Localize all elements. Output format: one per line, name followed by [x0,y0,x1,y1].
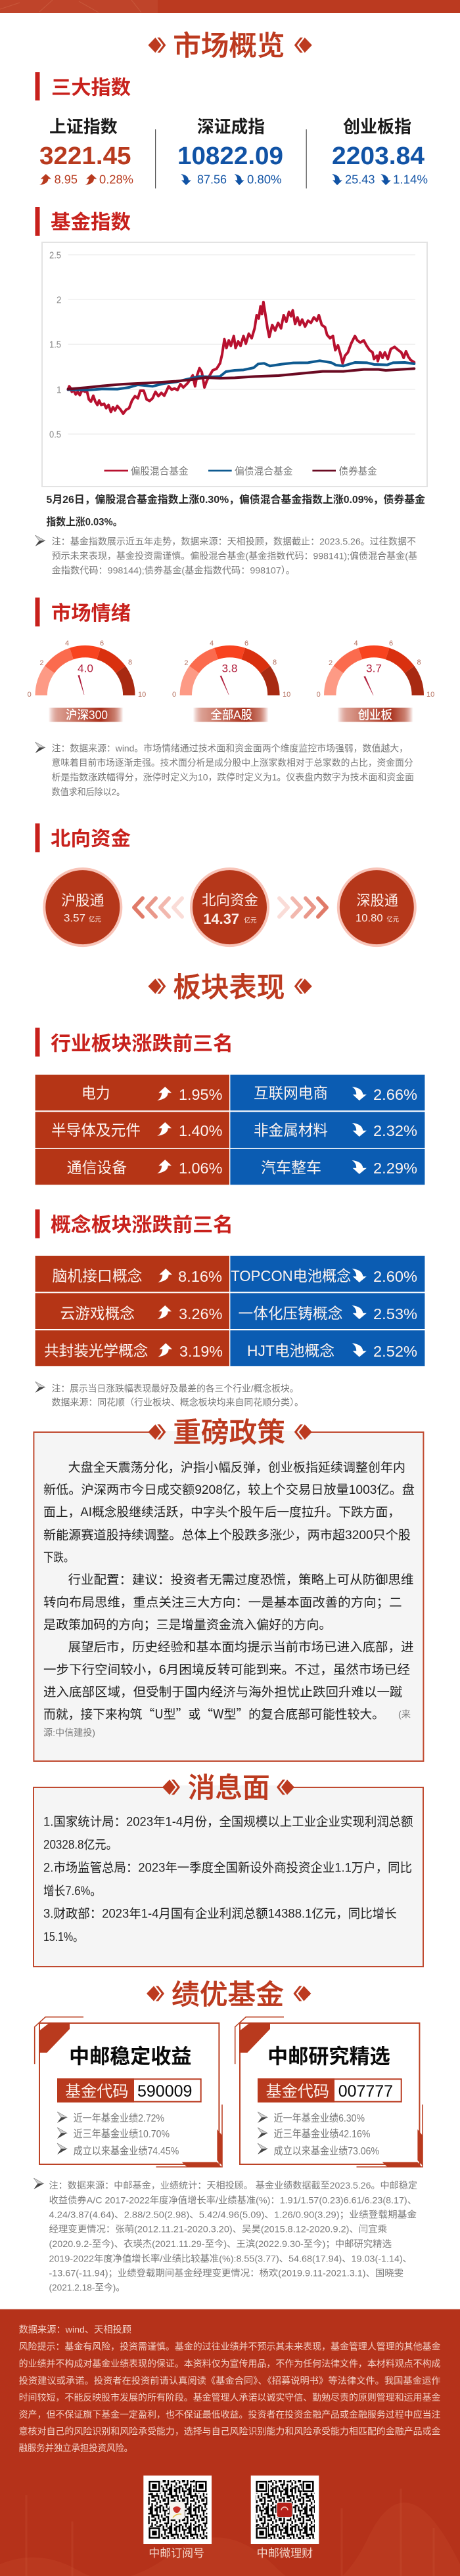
footer disclaimer text: 数据来源：wind、天相投顾 [19,2325,131,2335]
footer disclaimer text: 时间较短，不能反映股市发展的所有阶段。基金管理人承诺以诚实守信、勤勉尽责的原则管理和运用基金 [19,2392,441,2403]
title: 绩优基金 [147,1979,311,2010]
card: 中邮研究精选: 基金代码 [265,2083,329,2101]
footer disclaimer text: 投资建议或承诺。投资者在投资前请认真阅读《基金合同》、《招募说明书》等法律文件。我国基金运作 [19,2375,441,2386]
news list: 3.财政部：2023年1-4月国有企业利润总额14388.1亿元，同比增长 [43,1907,397,1921]
circle: 北向资金: 14.37 [203,911,239,927]
card: 中邮研究精选 [235,2017,423,2167]
table: industry sectors: 半导体及元件 [51,1122,141,1139]
news list: 20328.8亿元。 [43,1837,118,1852]
news list: 15.1%。 [43,1931,83,1944]
table: concept sectors: 共封装光学概念 [44,1342,148,1359]
line chart: fund indexes: 2 [57,294,62,306]
note: sectors: 数据来源：同花顺（行业板块、概念板块均来自同花顺分类）。 [52,1397,304,1407]
title: 板块表现: 板块表现 [173,972,285,1003]
gauge: 创业板: 10 [426,691,434,699]
chevrons: right [279,898,327,917]
table: industry sectors: 1.95% [179,1086,222,1103]
heading: 北向资金: 北向资金 [51,828,131,850]
table: industry sectors: 2.66% [373,1086,417,1103]
gauge: 全部A股: 6 [244,640,248,647]
gauge: 全部A股: 8 [273,659,277,666]
gauge: 创业板: 0 [317,691,321,699]
panel body text: 新低。沪深两市今日成交额9208亿，较上个交易日放量1003亿。盘 [43,1483,415,1497]
legend: 偏股混合基金 [131,466,189,477]
circle: 沪股通: 亿元 [89,915,101,923]
table: industry sectors: 2.29% [373,1160,417,1177]
card: 中邮稳定收益 [35,2017,222,2167]
table: concept sectors: HJT电池概念 [247,1342,334,1359]
note: fund index: 预示未来表现，基金投资需谨慎。偏股混合基金(基金指数代码：998141);偏债混合基金(基 [52,550,417,561]
heading: 北向资金 [35,823,131,852]
heading: 行业板块涨跌前三名: 行业板块涨跌前三名 [51,1033,233,1055]
note: funds: 4.24/3.87(4.64)、2.88/2.50(2.98)、5.42/4.96(5.09)、1.26/0.90(3.29)；业绩登载期基金 [49,2209,417,2220]
QR code: 中邮订阅号: 中邮订阅号 [149,2547,204,2560]
index: 创业板指: 1.14% [393,173,428,186]
index: 深证成指: 0.80% [247,173,281,186]
panel title [162,1772,294,1803]
news list: 增长7.6%。 [43,1884,101,1898]
card: 中邮稳定收益: 近三年基金业绩10.70% [74,2128,170,2140]
note: sectors: 注：展示当日涨跌幅表现最好及最差的各三个行业/概念板块。 [52,1383,298,1393]
circle: 深股通: 10.80 [356,911,383,925]
header band [0,0,460,13]
index: 深证成指: 深证成指 [197,117,265,137]
panel body text: 大盘全天震荡分化，沪指小幅反弹，创业板指延续调整创年内 [68,1460,405,1475]
table: concept sectors: TOPCON电池概念 [231,1267,351,1284]
note: funds: 2019-2022年度净值增长率/业绩比较基准(%):8.55(3.77)、54.68(17.94)、19.03(-1.14)、 [49,2253,412,2263]
title: 市场概览: 市场概览 [173,30,285,61]
circle: 沪股通 [44,869,121,946]
footer panel [0,2309,460,2576]
panel body text: 行业配置：建议：投资者无需过度恐慌，策略上可从防御思维 [68,1573,414,1587]
footer disclaimer text: 风险提示：基金有风险，投资需谨慎。基金的过往业绩并不预示其未来表现，基金管理人管理的其他基金 [19,2342,441,2352]
card: 中邮研究精选: 成立以来基金业绩73.06% [273,2145,379,2157]
legend: 偏债混合基金 [235,466,293,477]
gauge: 沪深300: 6 [100,640,104,647]
table: industry sectors: 互联网电商 [254,1085,328,1102]
panel body text: 转向布局思维，重点关注三大方向：一是基本面改善的方向；二 [43,1596,402,1610]
index: 上证指数: 3221.45 [39,142,131,170]
table: concept sectors [35,1256,425,1366]
panel body text: 面上，AI概念股继续活跃，中字头个股午后一度拉升。下跌方面， [43,1504,400,1519]
gauge: 沪深300: 0 [28,691,32,699]
card: 中邮研究精选: 中邮研究精选 [267,2045,390,2068]
footer disclaimer text: 意核对自己的风险识别和风险承受能力，选择与自己风险识别能力和风险承受能力相匹配的金融产品或金 [19,2426,441,2437]
gauge: 全部A股: 0 [172,691,176,699]
table: concept sectors: 云游戏概念 [60,1305,135,1322]
gauge: 创业板: 6 [389,640,393,647]
heading: 市场情绪: 市场情绪 [51,603,131,624]
panel body text: 展望后市，历史经验和基本面均提示当前市场已进入底部，进 [68,1640,414,1655]
index: 创业板指: 2203.84 [332,142,425,170]
gauge: 创业板: 2 [329,659,333,667]
panel body text: 是政策加码的方向；三是增量资金流入偏好的方向。 [43,1618,331,1632]
table: concept sectors: 2.52% [373,1343,417,1360]
gauge: 沪深300: 沪深300 [66,709,108,722]
note: funds: -13.67(-11.94)；业绩登载期间基金经理变更情况：杨欢(2019.9.11-2021.3.1)、国晓雯 [49,2267,403,2279]
note: market sentiment: 析是指数涨跌幅得分，涨停时定义为10，跌停时定义为1。仪表盘内数字为技术面和资金面 [52,772,414,782]
footer disclaimer text: 的业绩并不构成对基金业绩表现的保证。本资料仅为宣传用品，不作为任何法律文件，本材料观点不构成 [19,2358,441,2369]
heading: 基金指数 [35,207,131,236]
title: 板块表现 [148,972,312,1003]
line chart: fund indexes: 1 [57,385,62,395]
gauge: 沪深300: 4.0 [78,662,93,675]
news list: 2.市场监管总局：2023年一季度全国新设外商投资企业1.1万户，同比 [43,1861,412,1875]
gauge: 全部A股: 4 [210,640,214,647]
footer disclaimer text: 资产，但不保证旗下基金一定盈利，也不保证最低收益。投资者在投资金融产品或金融服务过程中应当注 [19,2409,441,2420]
gauge: 创业板: 创业板 [358,709,392,722]
gauge: 沪深300: 4 [65,640,69,647]
table: concept sectors: 3.26% [179,1305,222,1322]
news list: 1.国家统计局：2023年1-4月份，全国规模以上工业企业实现利润总额 [43,1815,413,1829]
index: 创业板指: 25.43 [345,173,375,186]
card: 中邮稳定收益: 基金代码 [65,2083,129,2101]
heading: 概念板块涨跌前三名 [35,1210,233,1238]
panel: 消息面 [34,1772,423,1967]
panel title: 消息面 [188,1772,270,1803]
heading: 概念板块涨跌前三名: 概念板块涨跌前三名 [51,1213,233,1236]
heading: 三大指数 [35,72,131,100]
card: 中邮稳定收益: 中邮稳定收益 [69,2045,192,2068]
panel body text: 源:中信建投) [43,1727,95,1737]
note: funds: (2021.2.18-至今)。 [49,2282,125,2293]
panel body text: 一步下行空间较小，6月困境反转可能到来。不过，虽然市场已经 [43,1663,410,1677]
heading: 行业板块涨跌前三名 [35,1028,233,1057]
gauge: 创业板: 3.7 [366,662,382,675]
gauge: 全部A股: 全部A股 [210,708,252,722]
table: industry sectors: 2.32% [373,1122,417,1139]
table: concept sectors: 脑机接口概念 [53,1267,142,1284]
chevrons: left [134,898,182,917]
circle: 北向资金 [191,869,268,946]
index: 深证成指 [177,117,283,186]
circle: 深股通: 亿元 [386,915,399,923]
note: market sentiment: 注：数据来源：wind。市场情绪通过技术面和资金面两个维度监控市场强弱，数值越大， [52,743,408,753]
panel body text [43,1460,415,1737]
line chart: fund indexes: 2.5 [49,250,61,261]
note: market sentiment: 意味着目前市场逐渐走强。技术面分析是成分股中上涨家数相对于总家数的占比，资金面分 [52,757,413,768]
index: 上证指数 [39,117,133,186]
card: 中邮研究精选: 近一年基金业绩6.30% [273,2112,365,2124]
index: 深证成指: 10822.09 [177,142,283,170]
heading: 基金指数: 基金指数 [51,211,131,233]
note: funds: 收益债券A/C 2017-2022年度净值增长率/业绩基准(%)：1.91/1.57(0.23)6.61/6.23(8.17)、 [49,2194,417,2205]
gauge: 沪深300: 2 [39,659,44,667]
gauge: 全部A股 [172,640,290,722]
QR code: 中邮订阅号 [143,2476,212,2560]
line chart: fund indexes [42,242,427,487]
panel body text: 下跌。 [43,1550,74,1565]
circle: 北向资金: 亿元 [244,916,257,925]
note: market sentiment: 数值求和后除以2。 [52,787,125,797]
card: 中邮稳定收益: 近一年基金业绩2.72% [74,2112,164,2124]
index: 创业板指: 创业板指 [343,117,411,137]
legend [104,466,377,477]
panel body text: 进入底部区域，但受制于国内经济与海外担忧止跌回升难以一蹴 [43,1685,402,1699]
index: 上证指数: 0.28% [99,173,133,186]
gauge: 创业板: 4 [354,640,358,647]
line chart: fund indexes: 1.5 [49,339,61,351]
note: funds [34,2178,417,2293]
panel body text: 新能源赛道股持续调整。总体上个股跌多涨少，两市超3200只个股 [43,1528,411,1542]
chart caption: 指数上涨0.03%。 [46,516,122,528]
panel title: 重磅政策 [173,1417,285,1448]
table: concept sectors: 一体化压铸概念 [238,1305,342,1322]
note: funds: 经理变更情况：张萌(2012.11.21-2020.3.20)、吴昊(2015.8.12-2020.9.2)、闫宜乘 [49,2224,387,2235]
heading: 三大指数: 三大指数 [51,77,131,98]
note: market sentiment [35,742,414,797]
legend: 债券基金 [339,466,377,477]
table: industry sectors: 1.06% [179,1160,222,1177]
panel: 重磅政策 [34,1417,423,1761]
panel body text: (来 [398,1709,411,1719]
card: 中邮稳定收益: 590009 [137,2082,192,2101]
circle: 沪股通: 3.57 [64,911,85,925]
gauge: 沪深300: 8 [128,659,132,666]
index: 深证成指: 87.56 [197,173,227,186]
table: concept sectors: 3.19% [179,1343,223,1360]
table: industry sectors [35,1075,425,1185]
table: industry sectors: 汽车整车 [261,1159,321,1176]
QR code: 中邮微理财 [251,2476,319,2560]
footer disclaimer text [19,2325,441,2453]
card: 中邮稳定收益: 成立以来基金业绩74.45% [74,2145,179,2157]
table: industry sectors: 电力 [81,1085,110,1102]
card: 中邮研究精选: 007777 [338,2082,393,2101]
news list [43,1815,413,1944]
note: sectors [35,1382,304,1407]
circle: 深股通 [338,869,415,946]
circle: 深股通: 深股通 [356,892,398,909]
northbound flow diagram [44,869,415,946]
card: 中邮研究精选: 近三年基金业绩42.16% [273,2128,370,2140]
footer disclaimer text: 融服务并独立承担投资风险。 [19,2443,133,2453]
gauge: 沪深300 [28,640,146,722]
panel: three indexes [39,117,428,188]
panel title [148,1417,312,1448]
gauge: 创业板: 8 [417,659,421,666]
gauge: 全部A股: 3.8 [222,662,238,675]
line chart: fund indexes: 0.5 [49,429,61,440]
index: 创业板指 [332,117,428,186]
gauge: 创业板 [317,640,434,722]
gauge: 全部A股: 2 [184,659,189,667]
heading: 市场情绪 [35,598,131,626]
title: 绩优基金: 绩优基金 [172,1979,284,2010]
note: funds: 注：数据来源：中邮基金，业绩统计：天相投顾。 基金业绩数据截至2023.5.26。中邮稳定 [49,2180,417,2191]
table: industry sectors: 通信设备 [67,1159,127,1176]
table: industry sectors: 非金属材料 [254,1122,328,1139]
table: industry sectors: 1.40% [179,1122,222,1139]
index: 上证指数: 上证指数 [49,117,118,137]
note: fund index: 金指数代码：998144);债券基金(基金指数代码：998107）。 [52,565,295,575]
chart caption: 5月26日，偏股混合基金指数上涨0.30%，偏债混合基金指数上涨0.09%，债券基金 [46,493,425,506]
index: 上证指数: 8.95 [55,173,78,186]
gauge: 沪深300: 10 [138,691,146,699]
panel body text: 而就，接下来构筑“U型”或“W型”的复合底部可能性较大。 [43,1705,384,1722]
table: concept sectors: 2.60% [373,1268,417,1285]
note: fund index [35,535,417,575]
circle: 沪股通: 沪股通 [61,892,104,909]
table: concept sectors: 2.53% [373,1305,417,1322]
circle: 北向资金: 北向资金 [202,892,258,909]
chart caption [46,493,425,528]
QR code: 中邮微理财: 中邮微理财 [257,2547,313,2560]
title: 市场概览 [148,30,312,61]
note: funds: (2020.9.2-至今)、衣瑛杰(2021.11.29-至今)、王滨(2022.9.30-至今)；中邮研究精选 [49,2238,392,2250]
table: concept sectors: 8.16% [178,1268,222,1285]
note: fund index: 注：基金指数展示近五年走势，数据来源：天相投顾，数据截止：2023.5.26。过往数据不 [52,536,416,546]
gauge: 全部A股: 10 [283,691,290,699]
